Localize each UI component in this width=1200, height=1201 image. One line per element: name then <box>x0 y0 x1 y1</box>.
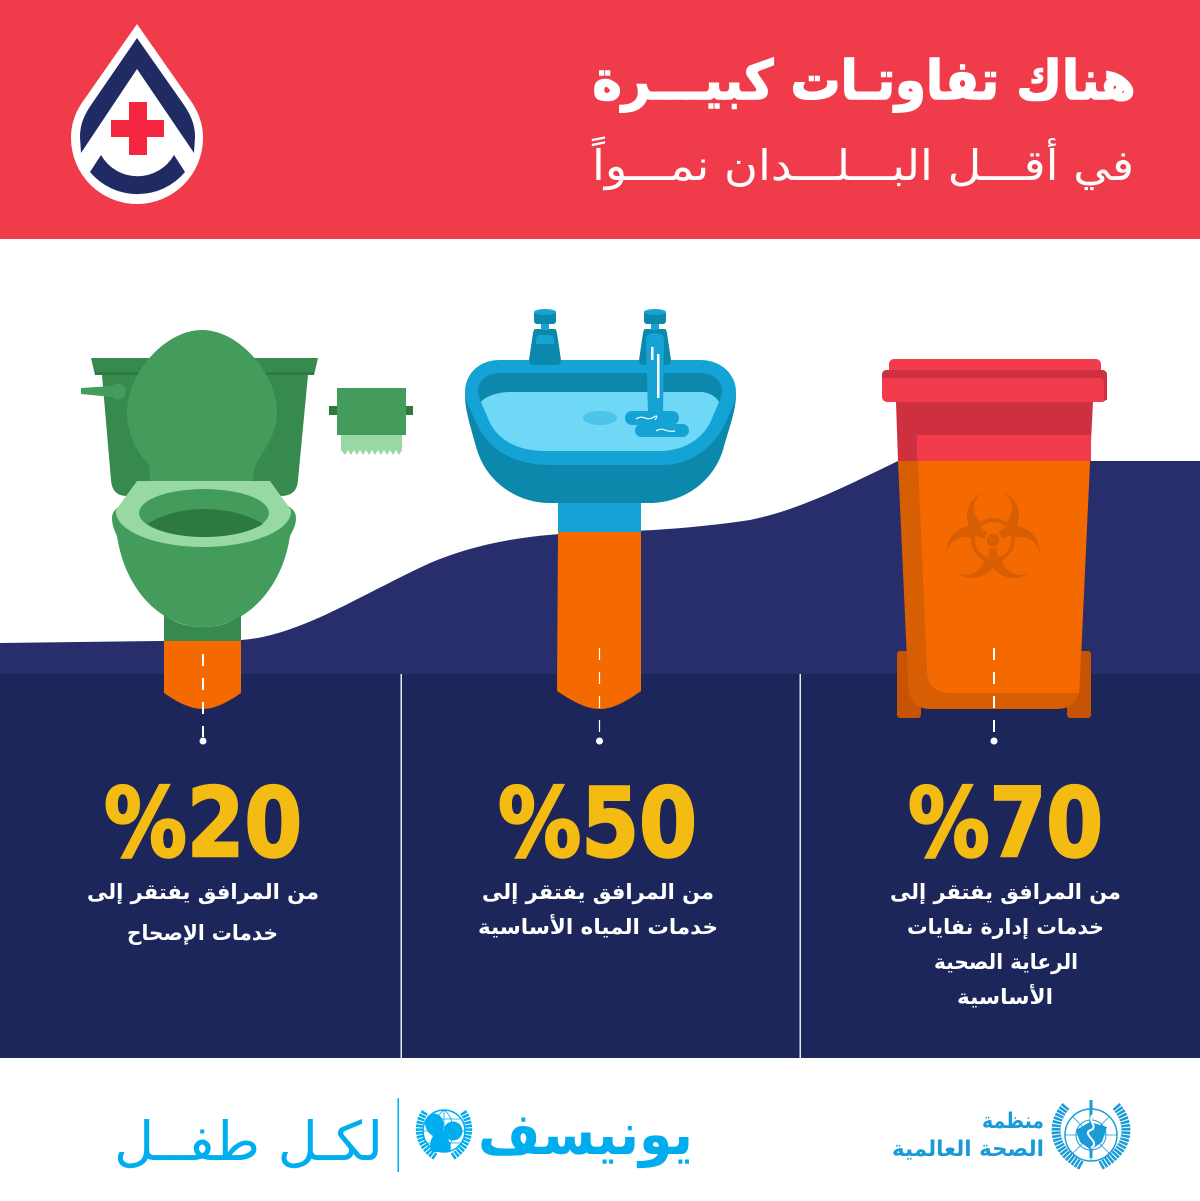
text: من المرافق يفتقر إلى <box>87 880 319 904</box>
wordmark <box>892 1109 1044 1162</box>
bin orange body <box>898 461 1090 709</box>
dark data panel <box>0 674 1200 1058</box>
running water <box>646 333 664 415</box>
stat: 70% waste <box>890 769 1121 1009</box>
bowl opening <box>139 489 269 537</box>
orange base segment 50% <box>557 532 641 709</box>
number 20%: %20 <box>104 769 302 879</box>
leader line 50% <box>596 648 603 744</box>
bowl water <box>147 509 263 537</box>
number 70%: %70 <box>908 769 1103 879</box>
toilet seat <box>116 481 291 547</box>
text <box>890 880 1121 1009</box>
wordmark: منظمة <box>982 1109 1044 1134</box>
logo divider <box>398 1098 399 1172</box>
leader line 70% <box>990 648 998 744</box>
toilet tank <box>102 375 308 496</box>
basin outer <box>465 395 736 503</box>
bin wheels <box>897 651 1091 718</box>
icon: blood drop logo <box>71 24 203 204</box>
basin rim <box>465 360 736 465</box>
slogan: لكـل طفــل <box>114 1110 383 1173</box>
orange base segment 20% <box>164 641 241 709</box>
text: خدمات الإصحاح <box>127 921 278 945</box>
header band <box>0 0 1200 239</box>
toilet base <box>164 615 241 641</box>
basin water <box>481 392 719 451</box>
pedestal <box>558 503 641 533</box>
text <box>87 880 319 945</box>
number 50%: %50 <box>498 769 697 879</box>
logo: WHO <box>892 1100 1126 1166</box>
text: من المرافق يفتقر إلى <box>482 880 714 904</box>
toilet lid <box>127 330 277 485</box>
basin inner wall <box>478 373 722 402</box>
stat: 20% sanitation <box>87 769 319 945</box>
wave background <box>0 461 1200 680</box>
text: خدمات المياه الأساسية <box>478 913 718 939</box>
drain <box>583 411 617 425</box>
right tap <box>639 309 671 365</box>
illustration: sink <box>465 309 736 709</box>
left tap <box>529 309 561 365</box>
title: هناك تفاوتـات كبيـــرة <box>592 49 1136 112</box>
text: الأساسية <box>957 983 1053 1009</box>
flush handle <box>81 384 126 400</box>
illustration: toilet paper roll <box>329 388 413 455</box>
column divider right <box>800 674 801 1058</box>
bin lid <box>882 359 1107 402</box>
icon: WHO emblem <box>1056 1100 1126 1166</box>
wordmark: يونيسف <box>478 1100 693 1169</box>
text <box>478 880 718 939</box>
icon: UNICEF emblem <box>419 1110 469 1157</box>
text: خدمات إدارة نفايات <box>907 915 1104 939</box>
leader line 20% <box>200 654 206 744</box>
illustration: toilet <box>81 330 318 709</box>
logo: UNICEF <box>114 1098 693 1173</box>
icon: biohazard <box>938 492 1048 587</box>
subtitle: في أقـــل البـــلـــدان نمـــواً <box>591 136 1134 191</box>
column divider left <box>400 674 402 1058</box>
water splash <box>625 411 689 437</box>
text: من المرافق يفتقر إلى <box>890 880 1121 904</box>
tank lid <box>91 358 318 375</box>
illustration: medical waste bin <box>882 359 1107 718</box>
wordmark: الصحة العالمية <box>892 1137 1044 1162</box>
toilet bowl <box>112 495 296 627</box>
stat: 50% water <box>478 769 718 939</box>
water highlights <box>651 347 660 398</box>
text: الرعاية الصحية <box>934 950 1078 974</box>
bin upper red <box>896 402 1093 461</box>
